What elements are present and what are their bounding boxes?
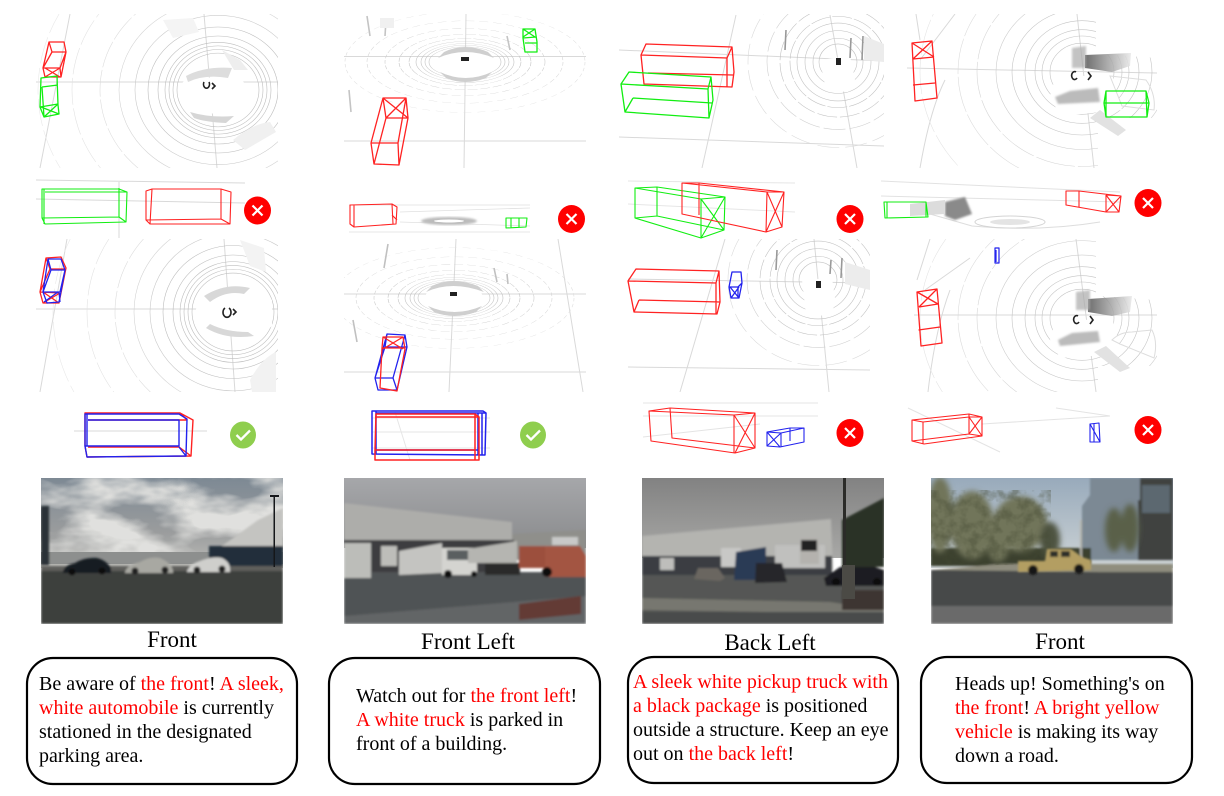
box: red box side: [146, 189, 231, 224]
panel: top view, scene 1 with green and red boxes: [36, 14, 278, 168]
callout: scene 1 description: stationed in the designated: [39, 721, 252, 743]
box: small blue box: [995, 248, 999, 263]
icon: green check: [230, 422, 256, 448]
photo: front camera, parked cars under cloudy sky: [41, 478, 283, 624]
box: blue box: [767, 428, 804, 447]
box: red box: [85, 413, 193, 457]
callout: scene 4 description: down a road.: [955, 745, 1059, 767]
panel: top view, scene 3: [619, 14, 884, 168]
icon: red cross: [1134, 416, 1162, 444]
box: blue box: [85, 414, 187, 457]
callout: scene 3 description: [628, 657, 898, 783]
photo: front camera, yellow pickup on road: [927, 477, 1173, 624]
box: blue box: [1090, 423, 1100, 442]
panel: top view, scene 1 match: [36, 239, 278, 392]
callout: scene 4 description: vehicle is making its way: [955, 721, 1158, 743]
caption: Back Left: Back Left: [724, 630, 816, 655]
panel: side view, matched boxes scene 2: [372, 411, 490, 460]
icon: red cross: [244, 196, 271, 224]
callout: scene 3 description: out on the back left!: [633, 743, 794, 765]
panel: side view, scene 3: [628, 181, 795, 238]
callout: scene 1 description: parking area.: [39, 745, 143, 767]
photo: front left camera, trucks at loading dock: [344, 478, 586, 624]
callout: scene 4 description: the front! A bright yellow: [955, 697, 1160, 719]
box: red box: [380, 337, 405, 391]
icon: red cross: [836, 419, 864, 447]
box: red box, scene 4: [912, 41, 937, 101]
box: red box: [628, 269, 720, 314]
box: blue predicted box: [43, 259, 65, 303]
panel: top view, scene 3 mismatch: [627, 239, 870, 392]
box: green box, scene 3: [621, 72, 713, 118]
panel: side view, scene 4 mismatch: [908, 408, 1110, 452]
box: green box, scene 1: [40, 76, 59, 117]
box: red box, scene 2: [371, 98, 408, 165]
panel: top view, scene 2: [344, 12, 586, 168]
panel: side view, scene 4: [881, 181, 1121, 228]
box: red box, scene 3: [641, 44, 734, 87]
box: green box side 2: [506, 218, 527, 228]
panel: side view, matched boxes scene 1: [74, 413, 207, 457]
box: red ground truth box: [40, 257, 66, 303]
caption: Front Left: Front Left: [421, 629, 516, 654]
callout: scene 2 description: front of a building.: [356, 733, 507, 755]
icon: green check: [520, 422, 546, 448]
box: red box: [917, 289, 942, 346]
photo: back left camera, loading dock with cars: [642, 478, 884, 624]
box: red box, scene 1: [43, 42, 66, 77]
box: red box: [375, 414, 479, 460]
callout: scene 2 description: Watch out for the front left!: [356, 685, 577, 707]
callout: scene 1 description: [27, 658, 297, 784]
panel: top view, scene 4 mismatch: [914, 239, 1157, 392]
caption: Front: Front: [1035, 629, 1086, 654]
box: blue box: [372, 411, 486, 455]
box: blue box: [729, 272, 742, 298]
panel: side view, scene 3 mismatch: [643, 403, 818, 453]
icon: red cross: [836, 205, 864, 233]
callout: scene 4 description: [921, 657, 1192, 783]
callout: scene 2 description: [329, 658, 600, 784]
box: green box side: [42, 188, 127, 224]
box: green box side 4: [884, 202, 928, 218]
panel: side view, scene 2: [349, 204, 530, 232]
panel: top view, scene 4: [907, 14, 1157, 168]
callout: scene 1 description: Be aware of the front! A sleek,: [39, 673, 284, 695]
callout: scene 3 description: A sleek white pickup truck with: [633, 671, 888, 693]
box: red box side 3: [682, 183, 784, 232]
box: green box side 3: [635, 187, 725, 238]
box: green box, scene 4: [1104, 91, 1149, 117]
callout: scene 1 description: white automobile is currently: [39, 697, 274, 719]
icon: red cross: [558, 205, 585, 233]
box: red box side 4: [1066, 191, 1121, 212]
box: red box: [649, 408, 755, 453]
callout: scene 4 description: Heads up! Something's on: [955, 673, 1165, 695]
panel: top view, scene 2 match: [334, 239, 586, 392]
callout: scene 2 description: A white truck is parked in: [356, 709, 563, 731]
panel: side view, scene 1: [36, 180, 245, 238]
caption: Front: Front: [147, 627, 198, 652]
callout: scene 3 description: a black package is positioned: [633, 695, 867, 717]
icon: red cross: [1134, 189, 1162, 217]
box: green box, scene 2: [523, 29, 537, 52]
callout: scene 3 description: outside a structure. Keep an eye: [633, 719, 889, 741]
box: blue box: [375, 334, 407, 390]
box: red box side 2: [350, 204, 397, 227]
box: red box: [912, 414, 982, 444]
